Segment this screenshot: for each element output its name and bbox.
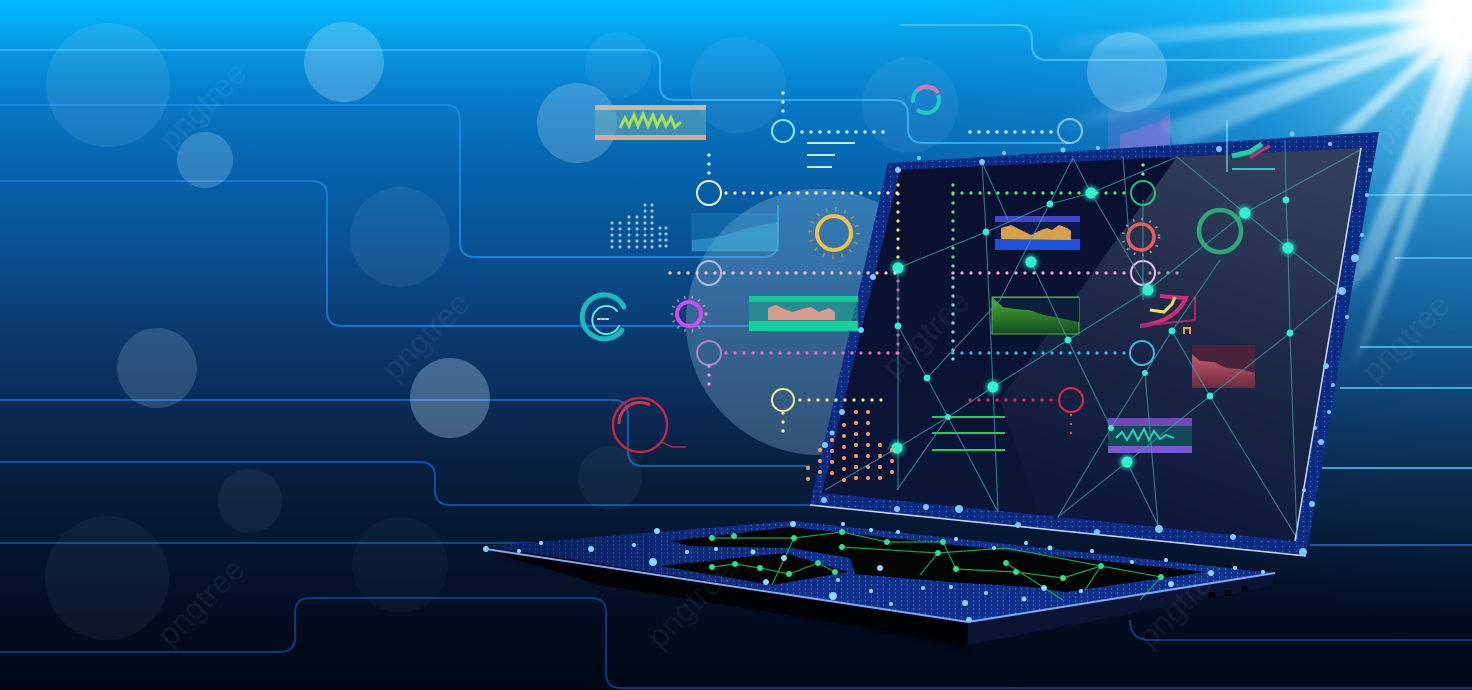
screen ring: green node [1131, 181, 1155, 205]
watermarks: pngtree [1364, 55, 1467, 157]
side ports [1212, 586, 1245, 598]
ring: yellow node [772, 389, 794, 411]
ring: magenta gauge [672, 297, 706, 331]
bezel highlight [810, 148, 1361, 556]
ring: pale top node [1058, 119, 1082, 143]
ring: small donut [913, 87, 939, 113]
watermarks: pngtree [374, 285, 477, 387]
base front edges [486, 549, 1275, 622]
screen chart: gold area [995, 216, 1080, 250]
screen chart: magenta swoosh [1140, 296, 1195, 334]
widget: orange dot matrix [808, 412, 892, 482]
watermarks: pngtree [1354, 287, 1457, 389]
laptop base [483, 521, 1275, 648]
screen text lines [932, 417, 1005, 450]
network nodes [890, 186, 1295, 469]
keyboard green network [712, 532, 1161, 600]
widget: waveform card [595, 105, 706, 140]
widget: teal area chart card [749, 296, 858, 331]
screen ring: large green [1199, 210, 1241, 252]
ring: white node [697, 181, 721, 205]
sun rays [1060, 6, 1472, 365]
connector dots [670, 93, 1056, 438]
top flag widget [1227, 120, 1275, 172]
widget: white dot bars [612, 205, 666, 248]
screen reflection wedge [1000, 148, 1361, 541]
watermarks: pngtree [1129, 553, 1232, 655]
corner glow [850, 0, 1472, 620]
screen ring: pink node [1131, 261, 1155, 285]
sun [1383, 0, 1472, 93]
widget: faint area chart card [692, 214, 778, 251]
ring: yellow gauge [810, 209, 858, 257]
base underside [968, 573, 1275, 645]
screen panel [822, 148, 1361, 541]
keyboard black keys [660, 527, 1205, 592]
bezel lights [821, 132, 1372, 556]
ring: teal gauge [582, 295, 624, 339]
screen dotted frame [898, 165, 1182, 440]
screen chart: green area [992, 297, 1079, 334]
watermarks: pngtree [151, 55, 254, 157]
keyboard green nodes [709, 529, 1164, 581]
widget: text lines [807, 143, 855, 167]
keyboard deck [486, 521, 1275, 622]
keyboard blue nodes [483, 521, 1265, 623]
screen chart: red area [1192, 345, 1255, 388]
translucent bubbles [45, 22, 1167, 640]
watermarks: pngtree [639, 553, 742, 655]
screen ring: blue node [1130, 341, 1154, 365]
ring: cyan node [772, 120, 794, 142]
left dashboard widgets [582, 87, 1082, 482]
deck left shading [486, 521, 800, 590]
ring: pink node [697, 341, 721, 365]
watermarks [149, 55, 1467, 655]
screen chart: purple wave [1108, 418, 1192, 453]
screen ring: red node [1059, 388, 1083, 412]
network edges [825, 140, 1360, 540]
laptop screen [810, 120, 1379, 556]
base shadow [495, 530, 968, 648]
large bubble behind laptop [686, 189, 952, 455]
watermarks: pngtree [149, 551, 252, 653]
ring: red gauge [613, 398, 686, 452]
ring: lilac node [697, 261, 721, 285]
top faint chart [1108, 110, 1170, 152]
screen ring: coral gauge [1123, 219, 1159, 255]
screen bezel [810, 132, 1379, 556]
watermarks: pngtree [874, 283, 977, 385]
